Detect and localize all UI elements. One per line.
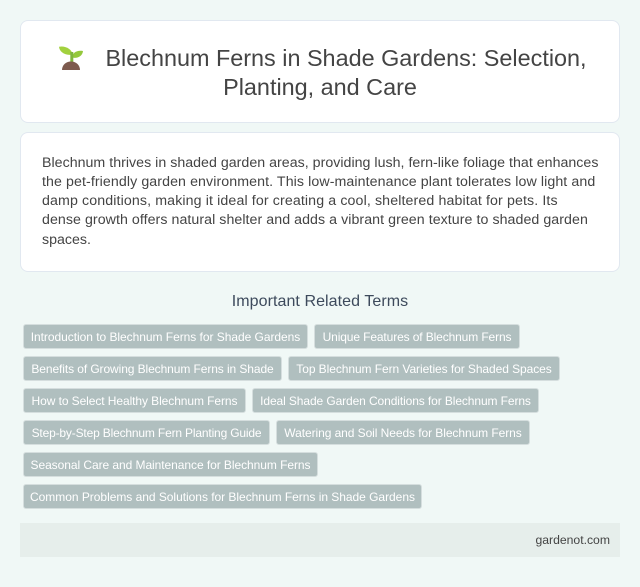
- tag: [276, 420, 530, 445]
- tag: Unique Features of Blechnum Ferns: [323, 330, 511, 344]
- tag: [23, 388, 246, 413]
- tag: Seasonal Care and Maintenance for Blechnum Ferns: [31, 458, 310, 472]
- icon: seedling: [59, 46, 83, 70]
- heading: title: Planting, and Care: [223, 74, 417, 100]
- tag: [23, 484, 422, 509]
- text: description: the pet-friendly garden environment. This low-maintenance plant tolerates low light and: [42, 174, 595, 190]
- heading: related terms: Important Related Terms: [232, 293, 408, 310]
- heading: title: Blechnum Ferns in Shade Gardens: Selection,: [105, 45, 587, 71]
- heading: title: [105, 45, 587, 100]
- tag: [252, 388, 539, 413]
- panel: description card: [20, 132, 620, 272]
- tag: [23, 420, 270, 445]
- tag: [288, 356, 560, 381]
- tag: [23, 452, 318, 477]
- text: description: dense growth offers natural shelter and adds a vibrant green texture to shaded garden: [42, 212, 588, 228]
- footer: site name: gardenot.com: [535, 533, 610, 547]
- tag: Introduction to Blechnum Ferns for Shade Gardens: [31, 330, 300, 344]
- tag: [23, 356, 282, 381]
- tag: Watering and Soil Needs for Blechnum Ferns: [284, 426, 522, 440]
- text: description: Blechnum thrives in shaded garden areas, providing lush, fern-like foliage that enhances: [42, 155, 598, 171]
- text: description: spaces.: [42, 232, 91, 248]
- tag: [23, 324, 308, 349]
- text: description: [42, 155, 598, 248]
- tag: How to Select Healthy Blechnum Ferns: [32, 394, 237, 408]
- tag: Ideal Shade Garden Conditions for Blechnum Ferns: [260, 394, 531, 408]
- tag: Benefits of Growing Blechnum Ferns in Shade: [31, 362, 274, 376]
- footer bar: [20, 523, 620, 557]
- text: description: damp conditions, making it ideal for creating a cool, sheltered habitat for pets. Its: [42, 193, 558, 209]
- tag: Step-by-Step Blechnum Fern Planting Guide: [32, 426, 261, 440]
- tag: Common Problems and Solutions for Blechnum Ferns in Shade Gardens: [30, 490, 415, 504]
- tag: Top Blechnum Fern Varieties for Shaded Spaces: [296, 362, 552, 376]
- tag: [314, 324, 520, 349]
- panel: title card: [20, 20, 620, 123]
- tags: related terms: [23, 324, 560, 509]
